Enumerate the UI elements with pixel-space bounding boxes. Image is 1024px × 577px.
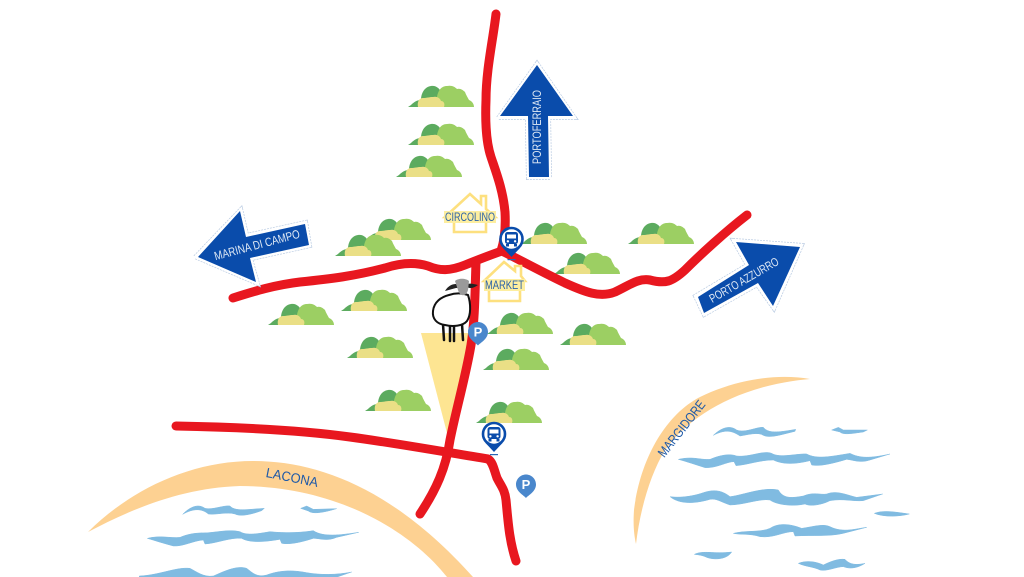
house: Circolino bbox=[444, 194, 496, 232]
arrow: Porto Azzurro: PORTO AZZURRO bbox=[707, 254, 781, 306]
bushes bbox=[268, 86, 694, 423]
arrow: Portoferraio: PORTOFERRAIO bbox=[530, 90, 544, 164]
yellow triangle path bbox=[421, 333, 472, 433]
roads bbox=[176, 14, 747, 561]
beach: Margidore bbox=[634, 377, 810, 544]
icon: bus stop south bbox=[483, 423, 505, 455]
house: Market bbox=[484, 262, 525, 301]
icon: parking north: P bbox=[474, 324, 483, 340]
label: Margidore: MARGIDORE bbox=[655, 397, 708, 460]
beach: Lacona bbox=[88, 461, 473, 577]
icon: bus stop north bbox=[500, 228, 522, 260]
label: Market: MARKET bbox=[485, 280, 524, 292]
label: Circolino: CIRCOLINO bbox=[445, 212, 495, 224]
arrow: Portoferraio bbox=[498, 63, 575, 178]
icon: parking south: P bbox=[522, 477, 531, 492]
icon: parking south bbox=[516, 474, 536, 498]
sea: Lacona waves bbox=[139, 506, 359, 577]
label: Lacona: LACONA bbox=[265, 465, 320, 490]
arrow: Marina di Campo: MARINA DI CAMPO bbox=[213, 227, 301, 263]
sea: Margidore waves bbox=[670, 427, 909, 570]
icon: sheep bbox=[433, 279, 478, 341]
icon: parking north bbox=[468, 322, 488, 346]
arrow: Marina di Campo bbox=[195, 209, 310, 284]
